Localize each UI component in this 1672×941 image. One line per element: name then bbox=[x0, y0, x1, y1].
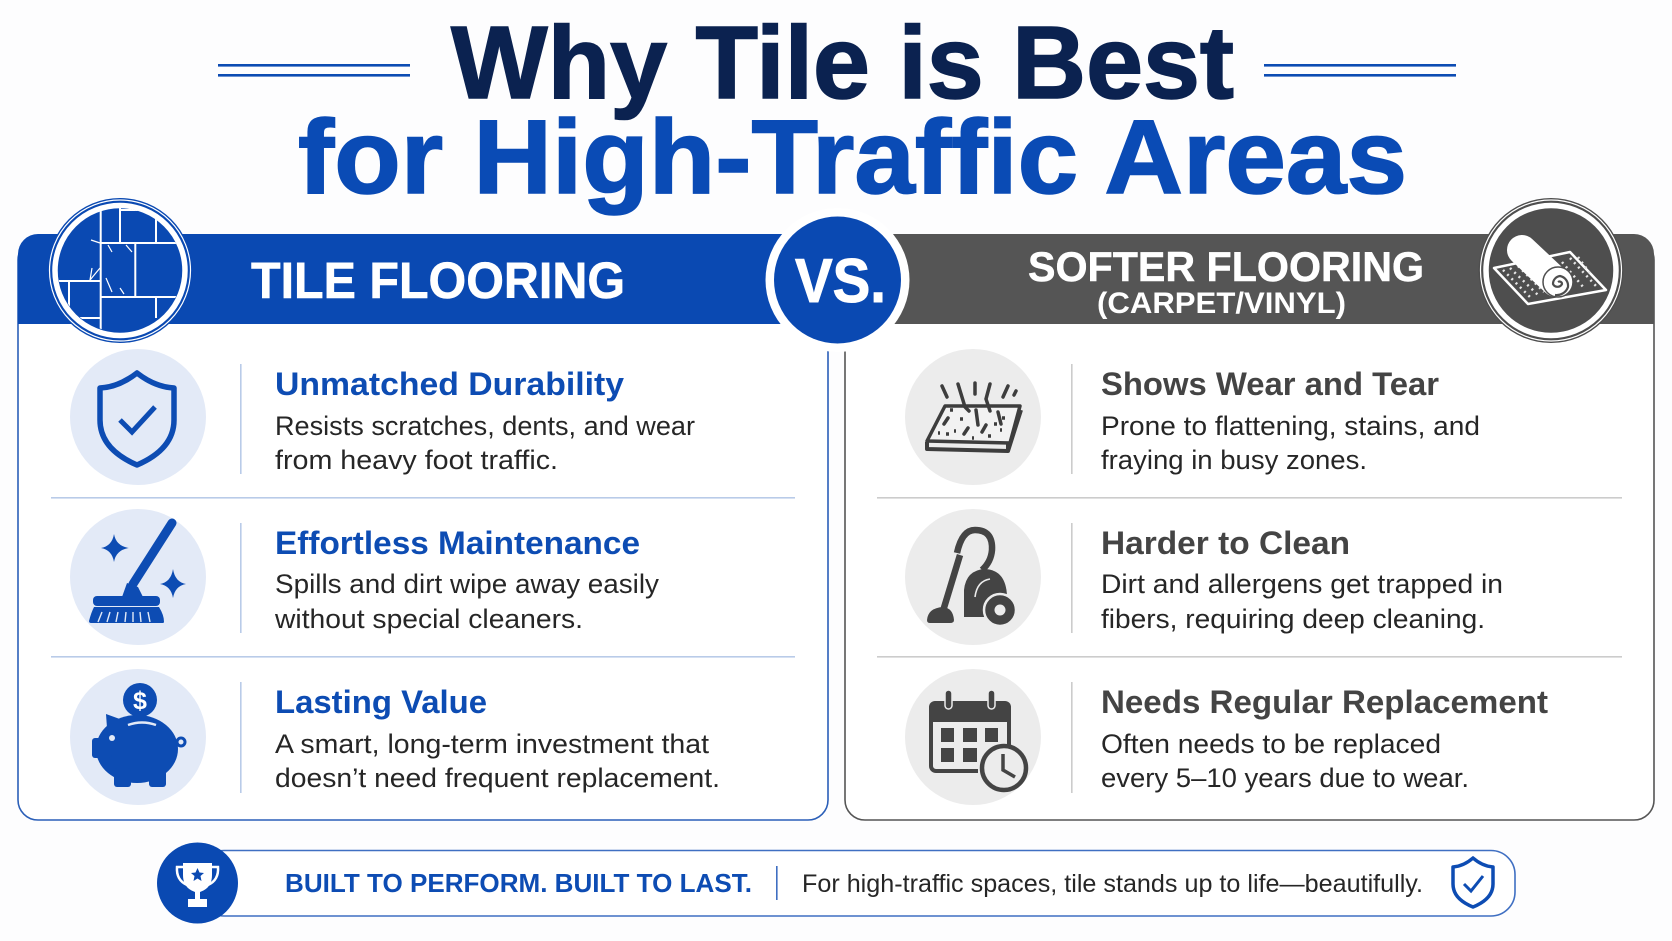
row: shows wear and tear bbox=[905, 349, 1480, 485]
icon: tile medallion bbox=[48, 198, 192, 343]
icon: broom bbox=[70, 509, 206, 645]
icon: carpet roll medallion bbox=[1478, 198, 1624, 343]
row: harder to clean bbox=[905, 509, 1503, 645]
panel: tile flooring bbox=[18, 198, 828, 820]
text: durability: from heavy foot traffic. bbox=[275, 445, 558, 475]
row: needs regular replacement bbox=[905, 669, 1548, 805]
footer banner bbox=[157, 842, 1515, 924]
text: replacement: Often needs to be replaced bbox=[1101, 729, 1441, 759]
text: maintenance bbox=[274, 525, 660, 634]
text: durability: Resists scratches, dents, and wear bbox=[275, 411, 695, 441]
text: maintenance: Effortless Maintenance bbox=[275, 525, 640, 561]
vs badge: VS. bbox=[795, 247, 886, 316]
text: replacement bbox=[1101, 684, 1548, 793]
icon: piggy bank: $ bbox=[133, 687, 147, 715]
header band: softer bbox=[880, 234, 1654, 324]
heading: tile flooring: TILE FLOORING bbox=[251, 252, 625, 309]
row: unmatched durability bbox=[70, 349, 695, 485]
icon: worn carpet bbox=[905, 349, 1041, 485]
icon: small shield bbox=[1453, 858, 1493, 907]
icon: piggy bank bbox=[70, 669, 206, 805]
title: for High-Traffic Areas bbox=[298, 99, 1407, 216]
title bbox=[298, 5, 1407, 216]
text: harder to clean: Harder to Clean bbox=[1101, 525, 1350, 561]
icon: shield bbox=[70, 349, 206, 485]
banner pill bbox=[200, 850, 1515, 916]
header band: tile bbox=[18, 234, 800, 324]
text: wear and tear bbox=[1101, 366, 1480, 475]
heading: softer flooring bbox=[1028, 243, 1424, 320]
row: effortless maintenance bbox=[70, 509, 660, 645]
text: harder to clean: Dirt and allergens get trapped in bbox=[1101, 569, 1503, 599]
sub tagline: For high-traffic spaces, tile stands up to life—beautifully. bbox=[802, 870, 1423, 898]
row: lasting value bbox=[70, 669, 720, 805]
text: replacement: Needs Regular Replacement bbox=[1101, 684, 1548, 720]
text: value: Lasting Value bbox=[275, 684, 487, 720]
heading: softer flooring: SOFTER FLOORING bbox=[1028, 243, 1424, 290]
icon: calendar and clock bbox=[905, 669, 1041, 805]
tagline: BUILT TO PERFORM. BUILT TO LAST. bbox=[285, 868, 752, 898]
text: durability: Unmatched Durability bbox=[275, 366, 624, 402]
panel: softer flooring bbox=[845, 198, 1654, 820]
text: harder to clean: fibers, requiring deep cleaning. bbox=[1101, 604, 1485, 634]
panel body: tile bbox=[18, 240, 828, 820]
text: harder to clean bbox=[1101, 525, 1503, 634]
text: durability bbox=[275, 366, 695, 475]
heading: softer flooring: (CARPET/VINYL) bbox=[1097, 287, 1346, 320]
title: Why Tile is Best bbox=[451, 5, 1234, 120]
icon: vacuum cleaner bbox=[905, 509, 1041, 645]
text: value bbox=[275, 684, 720, 793]
text: replacement: every 5–10 years due to wear. bbox=[1101, 763, 1469, 793]
text: wear and tear: Shows Wear and Tear bbox=[1101, 366, 1439, 402]
vs badge bbox=[766, 208, 910, 352]
icon: trophy bbox=[157, 842, 238, 924]
text: wear and tear: fraying in busy zones. bbox=[1101, 445, 1367, 475]
text: maintenance: Spills and dirt wipe away easily bbox=[275, 569, 660, 599]
panel body: softer bbox=[845, 240, 1654, 820]
text: value: doesn’t need frequent replacement. bbox=[275, 763, 720, 793]
text: wear and tear: Prone to flattening, stains, and bbox=[1101, 411, 1480, 441]
text: maintenance: without special cleaners. bbox=[274, 604, 583, 634]
text: value: A smart, long-term investment that bbox=[275, 729, 710, 759]
